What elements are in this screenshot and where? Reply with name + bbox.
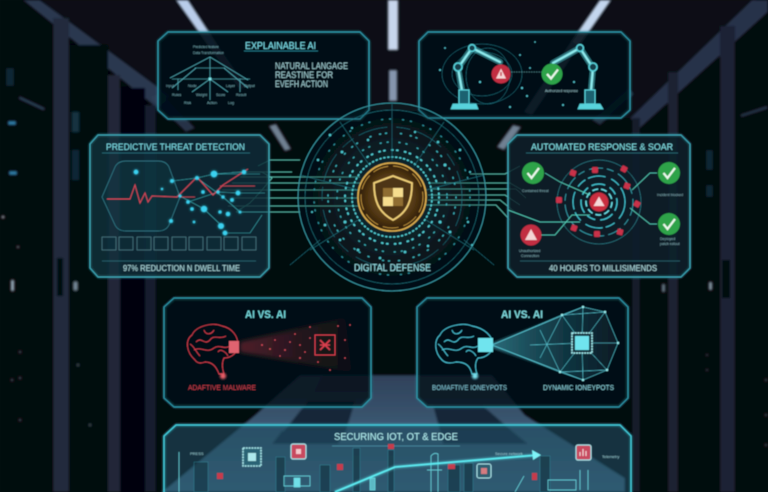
decision tree diagram: Layer — [226, 84, 236, 88]
particle stream — [240, 318, 352, 372]
data rings — [290, 103, 494, 291]
stat: dwell time: 97% REDUCTION N DWELL TIME — [123, 263, 240, 273]
stat: response time: 40 HOURS TO MILLISIMENDS — [549, 263, 657, 273]
icon: chip — [572, 333, 592, 353]
panel frame — [164, 425, 631, 492]
panel: explainable AI — [158, 32, 369, 119]
body text: NATURAL LANGAGE — [275, 61, 348, 71]
small labels: Secure network — [495, 451, 523, 456]
scattered data points — [311, 127, 473, 259]
icon: check top left — [522, 162, 544, 184]
timeline boxes — [102, 237, 256, 250]
decision tree diagram: Action — [207, 101, 217, 105]
skyline — [194, 448, 550, 492]
mesh beam — [492, 307, 618, 380]
panel frame — [417, 298, 628, 407]
small label: Authorized response — [545, 89, 578, 93]
icon: left robot arm — [451, 45, 500, 109]
small labels: PRESS — [190, 451, 204, 456]
decision tree diagram: Rules — [172, 93, 181, 97]
icon: check top right — [658, 162, 680, 184]
panel: AI vs AI adaptive malware — [164, 298, 371, 407]
network lines — [172, 172, 268, 233]
heading: EXPLAINABLE AI — [245, 40, 316, 52]
decision tree diagram: Risk — [184, 101, 191, 105]
panel frame — [158, 32, 369, 119]
ceiling lights — [150, 0, 634, 151]
label: DIGITAL DEFENSE — [354, 263, 431, 274]
right server racks — [630, 0, 768, 492]
icon: edge chip — [243, 448, 261, 466]
icon: red brain — [187, 324, 239, 379]
icon: blue brain — [436, 324, 493, 379]
icon: check badge — [542, 64, 562, 84]
icon: device badge left — [291, 444, 306, 459]
small labels — [190, 451, 619, 459]
heading: AI VS. AI — [245, 309, 286, 321]
small labels: Connection — [521, 254, 539, 258]
growth arrow — [335, 450, 541, 492]
icon: alert lower left — [520, 224, 542, 246]
threat markers — [556, 165, 641, 237]
decision tree diagram: Predicted feature — [193, 45, 219, 49]
decision tree diagram: Data Transformation — [193, 51, 224, 55]
icon: malware chip — [315, 335, 335, 355]
panel frame — [90, 135, 269, 277]
decision tree diagram — [166, 45, 255, 105]
heading: AUTOMATED RESPONSE & SOAR — [531, 142, 673, 153]
small red indicators — [217, 444, 537, 480]
decision tree diagram: Node — [188, 84, 197, 88]
decision tree diagram: Result — [236, 93, 246, 97]
icon: device badge right — [576, 445, 591, 460]
right label: DYNAMIC IONEYPOTS — [543, 383, 614, 392]
heading: SECURING IOT, OT & EDGE — [334, 432, 458, 443]
decision tree diagram: Weight — [196, 93, 207, 97]
icon: shield — [374, 176, 412, 220]
small labels: Incident blocked — [657, 193, 683, 197]
decision tree diagram: Log — [228, 101, 234, 105]
data dots — [439, 41, 575, 108]
decision tree diagram: Input — [166, 84, 174, 88]
small labels — [519, 189, 683, 258]
ECG line — [107, 169, 248, 203]
heading: AI VS. AI — [501, 309, 543, 321]
gold ring — [358, 163, 426, 231]
body text: EVEFH ACTION — [275, 79, 328, 89]
icon: device badge center — [477, 464, 491, 478]
hexagon scope — [102, 161, 180, 231]
small labels: Contained threat — [522, 189, 549, 193]
panel frame — [419, 32, 630, 118]
panel: securing IoT, OT and edge — [164, 425, 631, 492]
floor — [162, 375, 625, 492]
connector lines — [508, 173, 657, 235]
panel frame — [508, 135, 690, 277]
small labels: Telemetry — [602, 454, 619, 459]
central circuit lines — [222, 160, 526, 220]
panel: AI vs AI dynamic honeypots — [417, 298, 628, 407]
panel: robotic arms — [419, 32, 630, 118]
orbit lines — [442, 44, 542, 104]
icon: check lower right — [658, 213, 680, 235]
small labels: Deployed — [660, 237, 675, 241]
icon: right robot arm — [553, 45, 603, 109]
decision tree diagram: Score — [216, 93, 225, 97]
body text: REASTINE FOR — [275, 70, 333, 80]
spiral core — [557, 160, 641, 244]
body text — [275, 61, 348, 89]
central emblem: digital defense — [290, 103, 494, 291]
panel frame — [164, 298, 371, 407]
small labels: patch rollout — [660, 242, 680, 246]
threat points — [134, 170, 246, 235]
left server racks — [2, 0, 170, 492]
left label: BOMAFTIVE IONEYPOTS — [432, 383, 507, 392]
icon: alert badge — [492, 64, 510, 84]
label: ADAFTIVE MALWARE — [188, 383, 256, 392]
icon: central alert — [590, 192, 608, 212]
small labels: Unauthorized — [519, 249, 540, 253]
decision tree diagram: Output — [244, 84, 255, 88]
panel: automated response and SOAR — [508, 135, 690, 277]
heading: PREDICTIVE THREAT DETECTION — [106, 142, 245, 153]
panel: predictive threat detection — [90, 135, 269, 277]
